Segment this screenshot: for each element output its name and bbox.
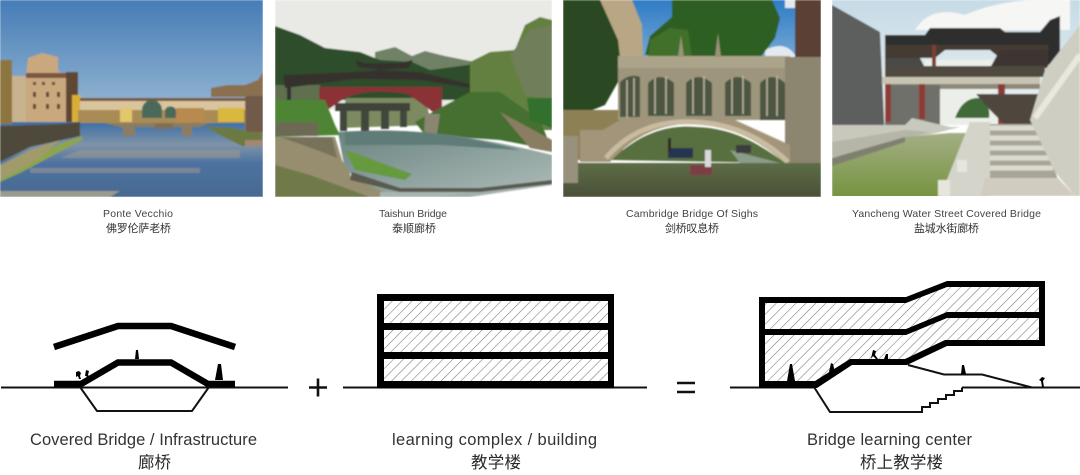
diagram: bridge learning center section <box>730 281 1080 412</box>
caption: Ponte Vecchio <box>103 208 173 236</box>
caption: Taishun Bridge <box>379 208 447 236</box>
label: Covered Bridge / Infrastructure <box>30 431 257 473</box>
icon: people in section <box>787 350 1045 387</box>
label: learning complex / building: learning complex / building <box>392 431 597 449</box>
diagram: covered bridge section <box>1 326 288 411</box>
icon: plus sign <box>309 378 327 396</box>
label: learning complex / building <box>392 431 597 473</box>
diagram: learning complex section <box>343 294 647 388</box>
caption: Cambridge Bridge Of Sighs: Cambridge Bridge Of Sighs <box>626 208 758 220</box>
icon: people on bridge <box>76 350 223 380</box>
label: Bridge learning center: Bridge learning center <box>807 431 972 449</box>
caption: Yancheng Water Street Covered Bridge <box>852 208 1041 236</box>
caption: Yancheng Water Street Covered Bridge: Yancheng Water Street Covered Bridge <box>852 208 1041 220</box>
caption: Taishun Bridge: Taishun Bridge <box>379 208 447 220</box>
photo: Ponte Vecchio <box>0 0 263 197</box>
photo: Cambridge Bridge Of Sighs <box>563 0 821 197</box>
icon: equals sign <box>677 383 695 392</box>
label: Bridge learning center: 桥上教学楼 <box>860 449 943 473</box>
caption: Yancheng Water Street Covered Bridge: 盐城水街廊桥 <box>914 220 979 236</box>
second bridge behind <box>335 103 410 111</box>
label: learning complex / building: 教学楼 <box>471 449 521 473</box>
label: Bridge learning center <box>807 431 972 473</box>
caption: Ponte Vecchio: 佛罗伦萨老桥 <box>106 220 171 236</box>
caption: Cambridge Bridge Of Sighs <box>626 208 758 236</box>
label: Covered Bridge / Infrastructure: Covered Bridge / Infrastructure <box>30 431 257 449</box>
caption: Cambridge Bridge Of Sighs: 剑桥叹息桥 <box>665 220 719 236</box>
photo: Yancheng Water Street Covered Bridge <box>832 0 1080 197</box>
caption: Taishun Bridge: 泰顺廊桥 <box>392 220 436 236</box>
label: Covered Bridge / Infrastructure: 廊桥 <box>138 449 171 473</box>
photo: Taishun Bridge <box>275 0 552 197</box>
caption: Ponte Vecchio: Ponte Vecchio <box>103 208 173 220</box>
